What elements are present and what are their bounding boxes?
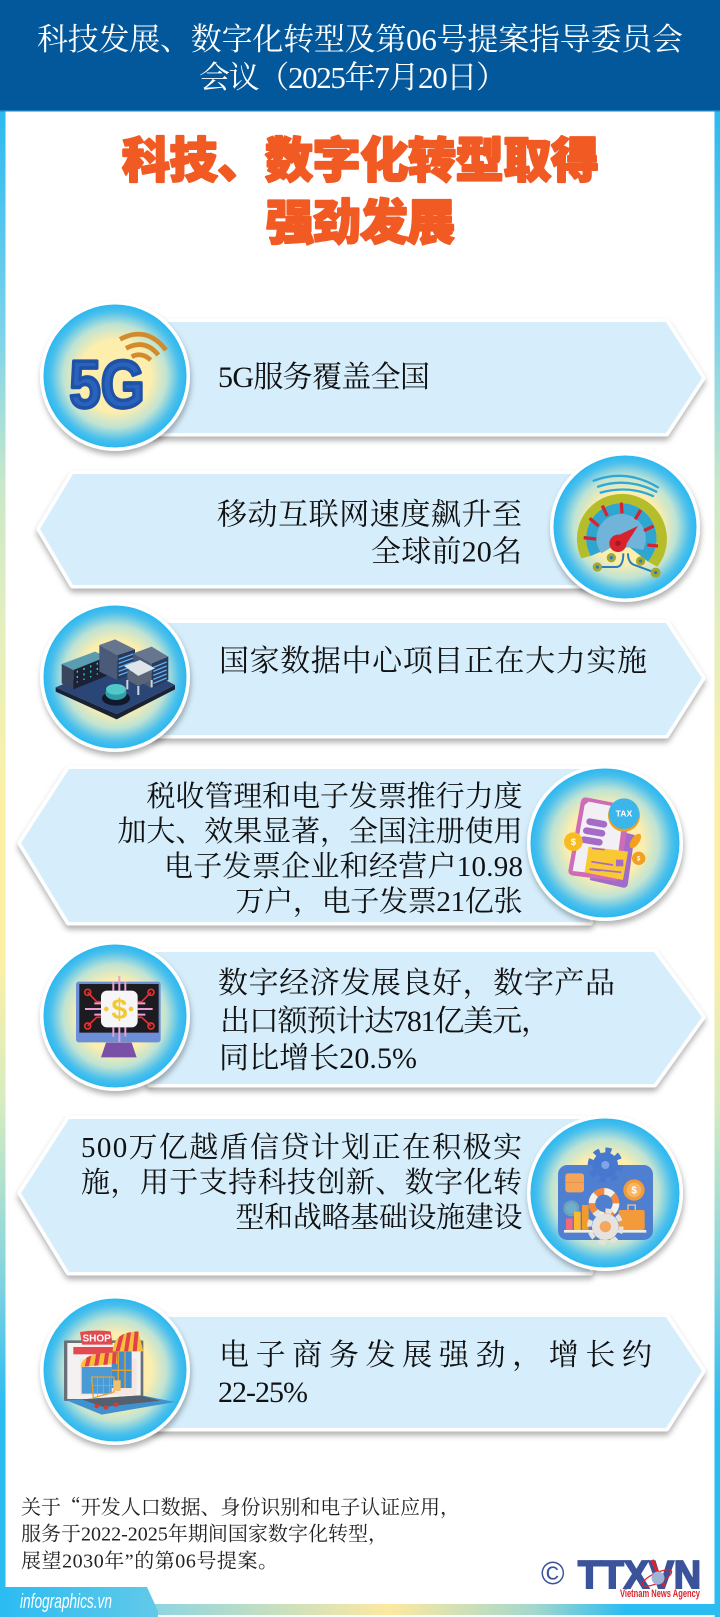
main title: 强劲发展: [266, 183, 455, 253]
circle 3: [40, 602, 190, 752]
banner 2: [40, 474, 600, 585]
text 4: 电子发票企业和经营户10.98: [164, 850, 523, 883]
text 6: 型和战略基础设施建设: [236, 1201, 522, 1234]
item 5: digital economy: [40, 941, 702, 1091]
circle 6: [527, 1115, 683, 1271]
text 4: [118, 780, 523, 918]
text 2: 全球前20名: [371, 536, 522, 568]
main title: 科技、数字化转型取得: [122, 121, 599, 191]
circle 1: [40, 301, 190, 451]
banner 7: [150, 1317, 702, 1428]
banner 6: [21, 1119, 590, 1272]
text 6: 500万亿越盾信贷计划正在积极实: [81, 1131, 522, 1164]
main title: [122, 121, 599, 253]
text 6: 施，用于支持科技创新、数字化转: [81, 1166, 522, 1199]
icon: monitor with dollar chip: [76, 976, 161, 1057]
header title: [37, 22, 683, 95]
footnote: 关于“开发人口数据、身份识别和电子认证应用，: [21, 1491, 460, 1520]
text 4: 加大、效果显著，全国注册使用: [118, 815, 522, 848]
text 5: [218, 967, 615, 1075]
icon: speedometer: [577, 476, 667, 578]
icon: tax phone: [564, 797, 645, 888]
icon: tax phone: $: [637, 857, 641, 863]
circle 2: [550, 452, 700, 602]
circle 7: [40, 1295, 190, 1445]
footnote: 服务于2022-2025年期间国家数字化转型，: [21, 1523, 388, 1546]
header bar: [0, 0, 720, 112]
text 6: [81, 1131, 522, 1234]
source tag: [0, 1587, 158, 1617]
text 3: 国家数据中心项目正在大力实施: [219, 645, 647, 678]
text 7: 电子商务发展强劲，增长约: [219, 1339, 652, 1372]
icon: finance dashboard: $: [631, 1186, 637, 1197]
text 5: 同比增长20.5%: [219, 1042, 417, 1075]
footnote: 展望2030年”的第06号提案。: [21, 1550, 278, 1573]
item 2: mobile speed: [40, 452, 700, 602]
item 3: data centre: [40, 602, 702, 752]
bottom strip: [0, 1604, 720, 1615]
text 2: [217, 498, 522, 568]
icon: laptop storefront: SHOP: [83, 1333, 111, 1344]
item 7: e-commerce: [40, 1295, 702, 1445]
source tag: infographics.vn: [20, 1591, 112, 1613]
banner 3: [150, 623, 702, 735]
icon: tax phone: $: [571, 837, 577, 847]
text 5: 数字经济发展良好，数字产品: [218, 967, 615, 1000]
footnote: [21, 1491, 460, 1573]
icon: monitor with dollar chip: $: [111, 994, 127, 1026]
circle 4: [527, 765, 683, 921]
icon: 5G with wifi: 5G: [69, 348, 145, 422]
item 4: e-invoice: [21, 765, 683, 922]
text 7: [218, 1339, 652, 1409]
item 1: 5G: [40, 301, 702, 451]
banner 4: [21, 769, 590, 922]
text 2: 移动互联网速度飙升至: [217, 498, 522, 532]
TTXVN logo: TTXVN: [578, 1554, 701, 1597]
header title: 会议（2025年7月20日）: [199, 60, 507, 95]
circle 5: [40, 941, 190, 1091]
icon: tax phone: TAX: [616, 809, 633, 819]
TTXVN logo: ©: [541, 1555, 565, 1591]
text 1: 5G服务覆盖全国: [218, 361, 430, 394]
text 7: 22-25%: [218, 1376, 308, 1409]
icon: data centre: [56, 639, 175, 719]
icon: finance dashboard: [558, 1150, 653, 1243]
icon: laptop storefront: [64, 1330, 175, 1415]
item 6: credit programme: [21, 1115, 683, 1272]
text 4: 万户，电子发票21亿张: [236, 885, 522, 918]
text 4: 税收管理和电子发票推行力度: [146, 780, 522, 813]
banner 5: [150, 952, 702, 1084]
text 5: 出口额预计达781亿美元，: [220, 1005, 551, 1038]
TTXVN logo: [541, 1554, 701, 1600]
banner 1: [150, 322, 702, 433]
header title: 科技发展、数字化转型及第06号提案指导委员会: [37, 22, 683, 57]
